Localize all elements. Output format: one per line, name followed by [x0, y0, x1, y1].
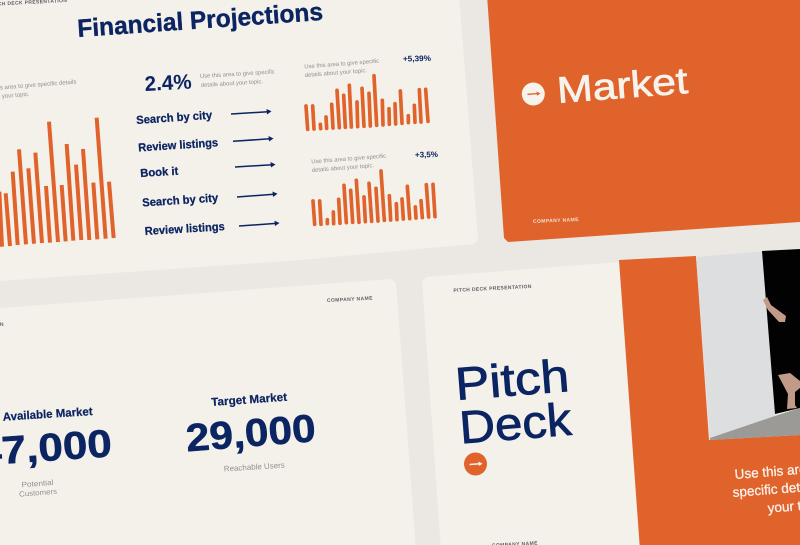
person — [763, 297, 800, 409]
chart description lower — [311, 154, 386, 174]
list: steps — [136, 110, 225, 238]
company name: COMPANY NAME — [327, 296, 373, 304]
company name: COMPANY NAME — [533, 217, 579, 225]
main bar chart — [0, 118, 114, 247]
left description: your topic. — [2, 92, 30, 100]
panel: market — [487, 0, 800, 242]
target market block: Reachable Users — [224, 461, 285, 473]
list: steps: Review listings — [138, 137, 219, 154]
arrows: steps — [231, 109, 280, 226]
callout text — [732, 457, 800, 516]
icon: arrow circle — [522, 82, 545, 106]
chart description upper: Use this area to give specific — [304, 59, 379, 70]
panel: pitch deck cover — [422, 249, 800, 545]
target market block — [184, 392, 317, 473]
chart description upper — [304, 59, 379, 79]
stat: +3,5%: +3,5% — [415, 150, 438, 159]
photo — [696, 249, 800, 440]
list: steps: Book it — [140, 166, 179, 180]
title: pitch deck: Pitch — [453, 349, 571, 410]
left description — [0, 79, 77, 100]
target market block: Target Market — [211, 392, 288, 409]
lower bar chart — [313, 171, 435, 224]
title: pitch deck: Deck — [457, 393, 574, 453]
orange panel — [619, 256, 800, 545]
left description: s area to give specific details — [0, 79, 77, 91]
upper bar chart — [306, 76, 428, 129]
stat description — [200, 69, 275, 89]
deck label: PITCH DECK PRESENTATION — [453, 284, 532, 294]
icon: arrow circle — [464, 452, 487, 476]
chart description lower: Use this area to give specific — [311, 154, 386, 165]
stat: +5,39%: +5,39% — [403, 54, 431, 63]
panel: market size — [0, 279, 416, 545]
list: steps: Search by city — [136, 110, 213, 127]
list: steps: Review listings — [144, 221, 225, 238]
stat: 2.4%: 2.4% — [144, 71, 193, 96]
available market block: Available Market — [2, 406, 93, 424]
chart description lower: details about your topic. — [312, 163, 375, 174]
stat description: details about your topic. — [201, 79, 264, 89]
title: pitch deck — [453, 349, 574, 453]
available market block: Customers — [19, 487, 58, 499]
chart description upper: details about your topic. — [305, 68, 368, 79]
stat description: Use this area to give specific — [200, 69, 275, 80]
panel: financial projections — [0, 0, 478, 281]
available market block — [0, 406, 113, 499]
list: steps: Search by city — [142, 192, 219, 209]
heading: market: Market — [555, 60, 690, 111]
target market block: 29,000 — [184, 407, 317, 460]
available market block: Potential — [21, 478, 54, 489]
